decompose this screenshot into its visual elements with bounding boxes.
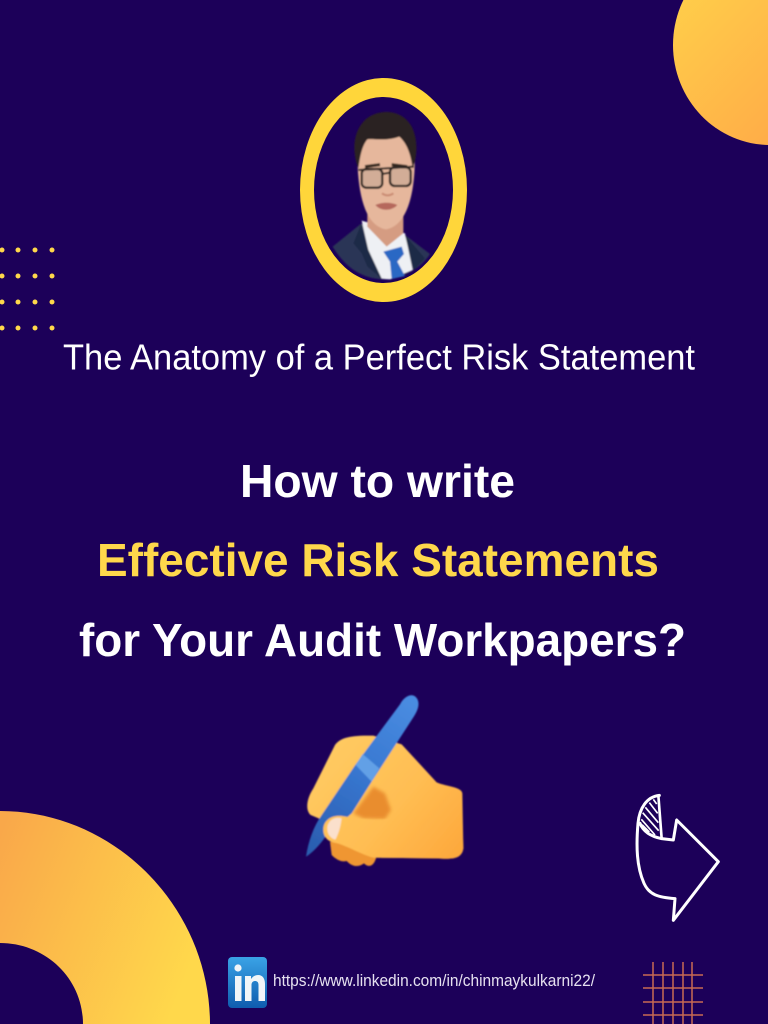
decorative grid bottom right [643, 962, 703, 1024]
pen band [356, 754, 379, 782]
heading line 1: How to write [240, 455, 515, 507]
thumb [323, 814, 463, 859]
portrait illustration [333, 112, 430, 279]
heading line 3: for Your Audit Workpapers? [79, 614, 686, 666]
icon: LinkedIn badge [228, 957, 267, 1008]
pen [306, 695, 418, 857]
yellow ring [300, 78, 467, 302]
main heading [79, 455, 686, 666]
hand back and index finger [307, 736, 463, 859]
thumbnail [327, 818, 342, 840]
portrait in yellow ring [300, 78, 467, 302]
heading line 2 highlighted: Effective Risk Statements [97, 534, 659, 586]
icon: hand-drawn curved arrow [637, 795, 718, 920]
lower fingers [330, 842, 377, 866]
decorative quarter ring bottom left [0, 811, 210, 1024]
palm hollow [353, 787, 391, 819]
subtitle: The Anatomy of a Perfect Risk Statement [63, 336, 695, 378]
LinkedIn URL: https://www.linkedin.com/in/chinmaykulkarni22/ [273, 971, 595, 990]
decorative orange blob top right [673, 0, 768, 145]
icon: hand writing with pen [306, 695, 463, 866]
dot grid left [0, 248, 54, 330]
